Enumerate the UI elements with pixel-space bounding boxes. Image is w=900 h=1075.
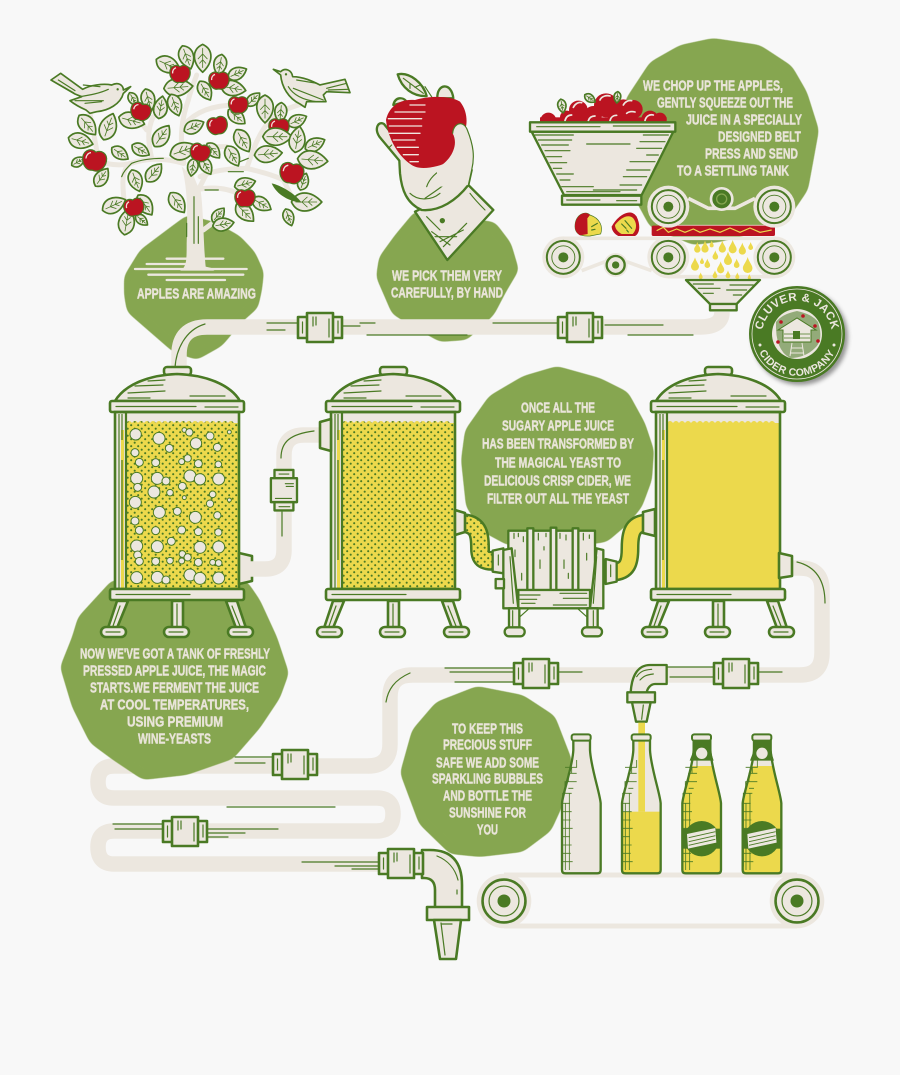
blob: fermenting xyxy=(60,580,289,780)
bottle three xyxy=(680,734,724,876)
caption: bottling: TO KEEP THIS xyxy=(452,720,523,738)
left roller xyxy=(477,874,531,928)
red apple xyxy=(386,97,467,168)
pipe: top from press to tank one xyxy=(179,312,722,372)
caption: filter: THE MAGICAL YEAST TO xyxy=(495,454,621,472)
coupling: serpentine xyxy=(163,817,207,846)
bottle four xyxy=(741,734,784,876)
pipe detail streaks xyxy=(113,562,825,869)
icon: hand holding apple xyxy=(377,74,493,260)
caption: filter: DELICIOUS CRISP CIDER, WE xyxy=(484,472,631,490)
coupling: middle right xyxy=(714,659,758,688)
pipe: yellow filter to tank three xyxy=(612,523,648,572)
leaves on pile xyxy=(557,91,621,114)
coupling: vertical xyxy=(271,470,297,510)
panel: tank three xyxy=(642,367,794,637)
dark leaf xyxy=(272,183,302,203)
caption: filter: ONCE ALL THE xyxy=(521,400,595,416)
juice bowl xyxy=(686,280,760,304)
caption: press: DESIGNED BELT xyxy=(718,128,801,146)
caption: apples are amazing: APPLES ARE AMAZING xyxy=(137,286,256,302)
caption: bottling: SUNSHINE FOR xyxy=(449,804,526,822)
caption: filter xyxy=(482,400,634,508)
apple behind leaves xyxy=(269,119,289,136)
logo text bottom: CIDER COMPANY xyxy=(760,349,834,376)
caption: bottling: SPARKLING BUBBLES xyxy=(432,770,543,788)
caption: press: PRESS AND SEND xyxy=(705,146,798,162)
blob: hand xyxy=(376,211,519,342)
nozzles xyxy=(493,548,503,573)
panel: filter machine xyxy=(493,528,617,636)
rollers xyxy=(542,186,795,278)
juice drips xyxy=(691,240,753,279)
caption: fermenting: AT COOL TEMPERATURES, xyxy=(100,696,249,714)
caption: fermenting: PRESSED APPLE JUICE, THE MAGIC xyxy=(83,662,266,680)
outlet elbow and spout xyxy=(379,849,469,959)
pipe streaks: top xyxy=(175,323,693,368)
tank one xyxy=(101,367,253,637)
hand xyxy=(377,123,472,210)
planks xyxy=(508,528,595,590)
leaves xyxy=(73,43,309,155)
apple slices xyxy=(575,213,639,236)
coupling: lower on blob xyxy=(273,750,317,779)
small rollers xyxy=(604,187,734,277)
caption: bottling: YOU xyxy=(477,822,498,838)
caption: press: JUICE IN A SPECIALLY xyxy=(686,112,802,128)
belt press machine xyxy=(530,91,795,310)
caption: press xyxy=(643,78,802,180)
coupling: middle left xyxy=(514,659,558,688)
arms and seat xyxy=(518,590,590,608)
caption: press: TO A SETTLING TANK xyxy=(677,162,789,180)
trunk and branches xyxy=(90,75,303,230)
panel: pick by hand xyxy=(376,74,519,342)
logo text top: CLUVER & JACK xyxy=(755,293,840,330)
tank two outlet nozzle xyxy=(455,510,465,535)
caption: fermenting: NOW WE'VE GOT A TANK OF FRESHLY xyxy=(80,646,270,662)
caption: fermenting xyxy=(80,646,270,748)
pipe: dotted tank two to filter xyxy=(460,523,498,561)
caption: fermenting: STARTS.WE FERMENT THE JUICE xyxy=(90,680,259,696)
faucet: pouring into bottle xyxy=(627,665,667,722)
caption: press: GENTLY SQUEEZE OUT THE xyxy=(657,94,793,112)
top and lower belts xyxy=(563,198,774,277)
panel: bottles xyxy=(562,723,784,876)
bottle one empty xyxy=(562,734,601,873)
cuff xyxy=(415,185,493,260)
logo shadow xyxy=(752,289,848,385)
more leaves xyxy=(66,125,329,236)
panel: chop and press xyxy=(530,38,819,310)
pour stream xyxy=(638,723,645,739)
caption: fermenting: WINE-YEASTS xyxy=(138,730,211,748)
blob: bottling xyxy=(400,686,572,857)
caption: pick by hand: WE PICK THEM VERY xyxy=(392,268,502,284)
tank one outlet xyxy=(239,553,252,584)
apple pile highlights xyxy=(565,96,653,121)
tank three outlet xyxy=(779,553,792,578)
caption: bottling: PRECIOUS STUFF xyxy=(443,736,532,754)
caption: fermenting: USING PREMIUM xyxy=(127,714,223,730)
bird left xyxy=(51,73,131,113)
caption: bottling: AND BOTTLE THE xyxy=(443,788,532,804)
caption: filter: SUGARY APPLE JUICE xyxy=(502,418,614,434)
conveyor belt xyxy=(477,874,824,928)
tank two inlet nozzle xyxy=(320,419,331,451)
apples xyxy=(81,65,305,218)
blob: press xyxy=(625,38,819,245)
caption: press: WE CHOP UP THE APPLES, xyxy=(643,78,783,94)
caption: bottling xyxy=(432,720,543,838)
logo emblem: treehouse xyxy=(772,309,822,359)
tank three inlet xyxy=(643,509,655,536)
caption: pick by hand xyxy=(391,268,503,302)
panel: apples are amazing xyxy=(51,43,350,360)
caption: bottling: SAFE WE ADD SOME xyxy=(436,754,539,772)
panel: logo xyxy=(749,286,851,388)
thumb xyxy=(436,124,473,187)
panel: bottling blob xyxy=(400,686,572,857)
apple highlights xyxy=(388,105,425,162)
panel: filter blob and text xyxy=(461,366,654,549)
pipe streak: tank one to tank two xyxy=(281,431,314,536)
crushed apples xyxy=(652,226,775,236)
caption: pick by hand: CAREFULLY, BY HAND xyxy=(391,284,503,302)
blob: filter xyxy=(461,366,654,549)
pipe: lower serpentine from tank three to outlet xyxy=(98,568,822,864)
legs xyxy=(509,608,598,628)
stem and finger tips xyxy=(393,86,453,105)
bubbles xyxy=(129,428,231,584)
pipe: tank one to tank two xyxy=(250,435,322,569)
bottle two filling xyxy=(620,734,663,875)
coupling: top left xyxy=(298,313,342,342)
ground lines xyxy=(135,259,247,280)
tree with apples and birds xyxy=(51,43,350,280)
leaf on apple xyxy=(398,74,427,96)
caption: filter: HAS BEEN TRANSFORMED BY xyxy=(482,436,634,452)
apple pile xyxy=(540,93,667,129)
logo separators xyxy=(758,344,836,346)
bird right xyxy=(273,69,350,107)
blob: apples xyxy=(124,215,264,360)
panel: fermenting tank one xyxy=(60,367,289,780)
coupling: top right xyxy=(558,313,602,342)
hopper xyxy=(532,132,673,195)
panel: fermenting tank two xyxy=(317,367,469,637)
logo disc xyxy=(749,286,845,382)
right roller xyxy=(770,874,824,928)
caption: filter: FILTER OUT ALL THE YEAST xyxy=(487,490,629,508)
